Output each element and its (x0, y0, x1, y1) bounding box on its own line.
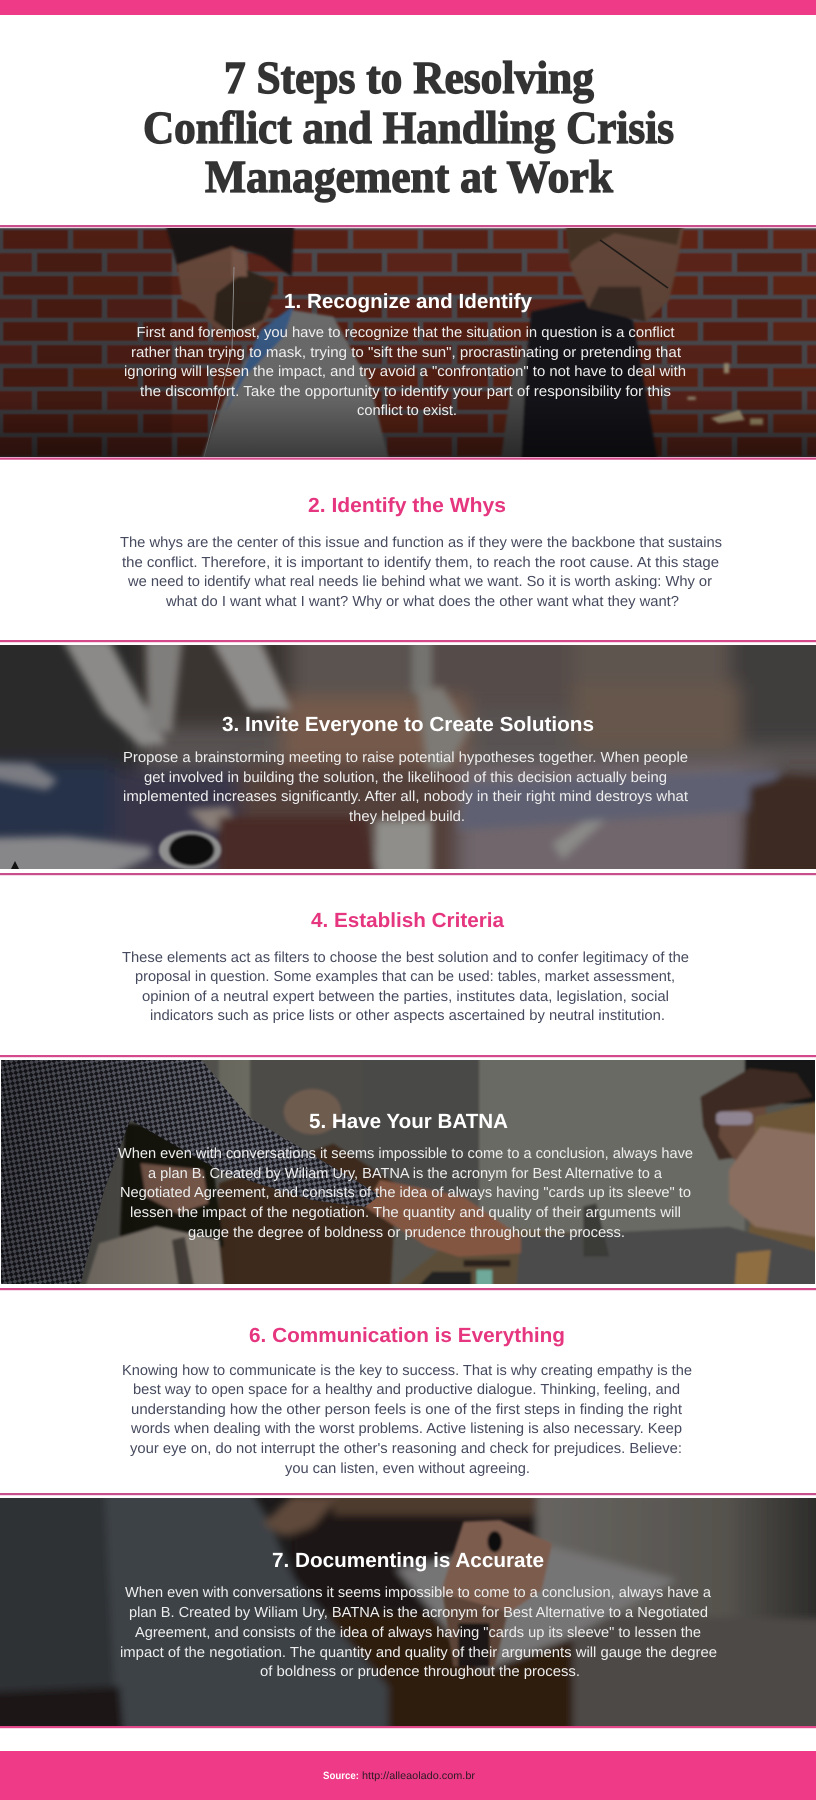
body text: step 2: the conflict. Therefore, it is important to identify them, to reach the root cause. At this stage (122, 555, 719, 571)
body text: step 6 (122, 1363, 692, 1477)
panel: step 4 Establish Criteria (122, 909, 689, 1024)
body text: step 4: proposal in question. Some examples that can be used: tables, market assessment, (135, 969, 675, 985)
body text: step 7: impact of the negotiation. The quantity and quality of their arguments will gauge the degree (120, 1645, 717, 1661)
blonde woman (748, 1100, 815, 1252)
body text: step 1: First and foremost, you have to recognize that the situation in question is a conflict (136, 325, 674, 341)
photo: blurred meeting with hands (0, 645, 816, 869)
body text: step 3: implemented increases significantly. After all, nobody in their right mind destroys what (123, 789, 688, 805)
table (397, 1228, 582, 1284)
panel: step 6 Communication is Everything (122, 1324, 692, 1477)
body text: step 3 (123, 750, 688, 825)
body text: step 2: we need to identify what real needs lie behind what we want. So it is worth asking: Why or (127, 574, 712, 590)
body text: step 7: plan B. Created by Wiliam Ury, BATNA is the acronym for Best Alternative to a Negotiated (129, 1605, 708, 1621)
bald man (284, 1089, 341, 1134)
body text: step 5: When even with conversations it seems impossible to come to a conclusion, always have (118, 1146, 693, 1162)
heading: step 7: 7. Documenting is Accurate (272, 1549, 544, 1572)
heading: step 1: 1. Recognize and Identify (284, 290, 533, 313)
body text: step 2 (120, 535, 722, 610)
paint flecks (711, 410, 745, 423)
panel: step 5 Have Your BATNA (0, 1050, 816, 1294)
heading: step 3: 3. Invite Everyone to Create Solutions (222, 713, 594, 736)
title: Management at Work (205, 151, 613, 203)
body text: step 7: Agreement, and consists of the idea of always having "cards up its sleeve" to lessen the (135, 1625, 701, 1641)
body text: step 3: get involved in building the solution, the likelihood of this decision actually being (144, 770, 667, 786)
body text: step 4 (122, 950, 689, 1024)
body text: step 1 (124, 325, 686, 419)
woman left (120, 1123, 224, 1253)
heading: step 5: 5. Have Your BATNA (309, 1110, 508, 1133)
left man hair (164, 228, 296, 278)
body text: step 2: The whys are the center of this issue and function as if they were the backbone that sustains (120, 535, 722, 551)
body text: step 5: gauge the degree of boldness or prudence throughout the process. (188, 1225, 625, 1241)
body text: step 7: of boldness or prudence throughout the process. (260, 1664, 580, 1680)
check shirt arm (80, 1120, 380, 1284)
body text: step 6: understanding how the other person feels is one of the first steps in finding the right (131, 1402, 682, 1418)
handshake (365, 1180, 521, 1257)
body text: step 5: lessen the impact of the negotiation. The quantity and quality of their arguments will (130, 1205, 681, 1221)
body text: step 7: When even with conversations it seems impossible to come to a conclusion, always have a (125, 1585, 712, 1601)
left man sweater (198, 310, 391, 467)
footer source band: Source: (323, 1770, 359, 1782)
body text: step 4: indicators such as price lists or other aspects ascertained by neutral institution. (150, 1008, 665, 1024)
photo: hand writing on paper (0, 1498, 816, 1726)
body text: step 6: you can listen, even without agreeing. (285, 1461, 530, 1477)
body text: step 1: the discomfort. Take the opportunity to identify your part of responsibility for this (140, 384, 671, 400)
title (143, 52, 674, 203)
panel: step 2 Identify the Whys (120, 494, 722, 610)
body text: step 1: ignoring will lessen the impact, and try avoid a "confrontation" to not have to deal with (124, 364, 686, 380)
body text: step 6: Knowing how to communicate is the key to success. That is why creating empathy is the (122, 1363, 692, 1379)
body text: step 4: opinion of a neutral expert between the parties, institutes data, legislation, social (142, 989, 669, 1005)
photo: handshake in a meeting room (0, 1050, 816, 1294)
black-hair woman (700, 1068, 812, 1160)
footer source band: http://alleaolado.com.br (362, 1770, 476, 1782)
body text: step 5: Negotiated Agreement, and consists of the idea of always having "cards up its sleeve" to (120, 1185, 691, 1201)
panel: step 7 Documenting is Accurate (0, 1493, 816, 1728)
top pink band (0, 0, 816, 15)
panel: step 1 Recognize and Identify (0, 220, 816, 468)
body text: step 4: These elements act as filters to choose the best solution and to confer legitimacy of the (122, 950, 689, 966)
body text: step 6: your eye on, do not interrupt the other's reasoning and check for prejudices. Believe: (130, 1441, 682, 1457)
body text: step 2: what do I want what I want? Why or what does the other want what they want? (165, 594, 679, 610)
body text: step 7 (120, 1585, 717, 1680)
body text: step 6: words when dealing with the worst problems. Active listening is also necessary. Keep (130, 1421, 682, 1437)
body text: step 3: Propose a brainstorming meeting to raise potential hypotheses together. When people (123, 750, 688, 766)
body text: step 1: rather than trying to mask, trying to "sift the sun", procrastinating or pretending that (131, 345, 681, 361)
footer source band (0, 1751, 816, 1800)
body text: step 6: best way to open space for a healthy and productive dialogue. Thinking, feeling, and (133, 1382, 680, 1398)
panel: step 3 Invite Everyone to Create Solutions (0, 640, 816, 876)
laptop, bottle (419, 1270, 472, 1284)
body text: step 5: a plan B. Created by Wiliam Ury, BATNA is the acronym for Best Alternative to a (148, 1166, 663, 1182)
heading: step 4: 4. Establish Criteria (311, 909, 505, 932)
title: 7 Steps to Resolving (224, 52, 594, 104)
body text: step 1: conflict to exist. (357, 403, 457, 419)
right man (501, 347, 530, 456)
body text: step 3: they helped build. (349, 809, 465, 825)
title: Conflict and Handling Crisis (143, 102, 674, 154)
heading: step 6: 6. Communication is Everything (249, 1324, 565, 1347)
body text: step 5 (118, 1146, 693, 1241)
photo: two men back to back against a brick wall (0, 220, 816, 468)
heading: step 2: 2. Identify the Whys (308, 494, 506, 517)
